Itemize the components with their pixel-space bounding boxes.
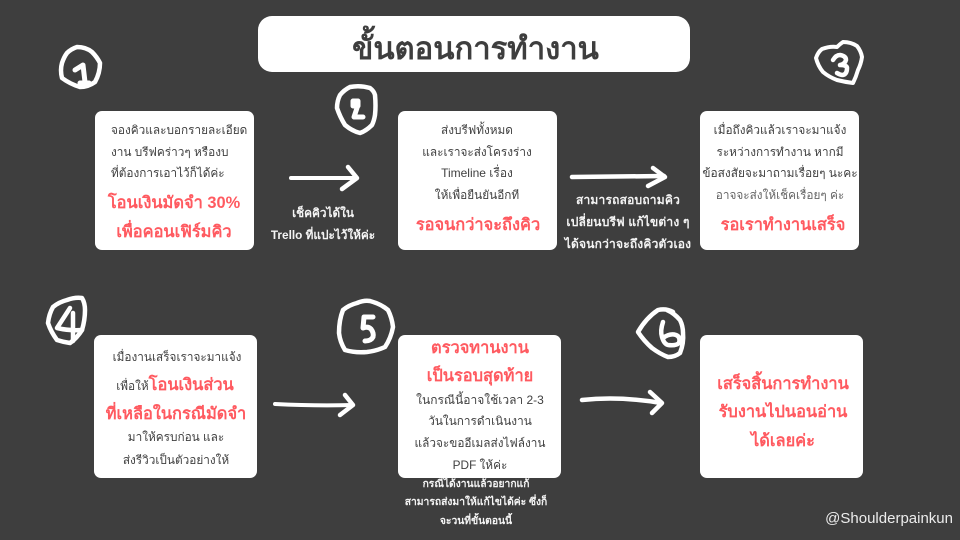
panel: step 6 [700,335,863,478]
step 2 text line 1: ส่งบรีฟทั้งหมด [441,123,513,137]
step 1 text line 3: ที่ต้องการเอาไว้ก็ได้ค่ะ [111,166,225,180]
step 5 text line 3: แล้วจะขออีเมลส่งไฟล์งาน [415,436,545,450]
arrow: step 1 to 2 [291,167,357,189]
step 1 text line 1: จองคิวและบอกรายละเอียด [111,123,247,137]
step 4 highlight: ที่เหลือในกรณีมัดจำ [106,405,246,423]
caption: revisions [405,478,547,527]
icon: number 4 [48,298,85,343]
step 4 mixed line: เพื่อให้โอนเงินส่วน [116,376,234,394]
step 6 highlight line 3: ได้เลยค่ะ [751,432,815,450]
caption: change brief: เปลี่ยนบรีฟ แก้ไขต่าง ๆ [566,215,690,229]
caption: revisions: สามารถส่งมาให้แก้ไขได้ค่ะ ซึ่งก็ [405,497,547,508]
step 4 text line 1: เมื่องานเสร็จเราจะมาแจ้ง [113,350,241,364]
step 3 text line 3: ข้อสงสัยจะมาถามเรื่อยๆ นะคะ [702,166,858,180]
step 5 text line 1: ในกรณีนี้อาจใช้เวลา 2-3 [416,393,544,407]
step 2 text line 4: ให้เพื่อยืนยันอีกที [435,188,519,202]
icon: number 6 [638,309,683,357]
step 5 text line 4: PDF ให้ค่ะ [453,458,507,472]
panel: step 4 [94,335,257,478]
arrow: step 5 to 6 [582,392,662,413]
step 3 text line 2: ระหว่างการทำงาน หากมี [716,145,844,159]
step 6 highlight line 1: เสร็จสิ้นการทำงาน [717,375,849,393]
icon: number 3 [816,42,862,83]
panel: step 3 [700,111,859,250]
step 5 highlight line 2: เป็นรอบสุดท้าย [427,367,533,385]
step 3 text line 4: อาจจะส่งให้เช็คเรื่อยๆ ค่ะ [716,188,844,202]
caption: change brief: สามารถสอบถามคิว [576,193,680,207]
caption: Trello [271,206,375,242]
step 2 text line 2: และเราจะส่งโครงร่าง [422,145,532,159]
step 1 highlight line 1: โอนเงินมัดจำ 30% [108,194,240,212]
step 1 text line 2: งาน บรีฟคร่าวๆ หรืองบ [111,145,228,159]
panel: step 2 [398,111,557,250]
title [261,16,690,72]
step 4 text line 4: มาให้ครบก่อน และ [128,430,224,444]
icon: number 1 [61,47,100,87]
arrow: step 2 to 3 [572,168,665,186]
step 5 highlight line 1: ตรวจทานงาน [431,339,529,357]
step 5 text line 2: วันในการดำเนินงาน [428,414,532,428]
step 1 highlight line 2: เพื่อคอนเฟิร์มคิว [116,223,232,241]
credit: @Shoulderpainkun [825,510,953,527]
caption: revisions: จะวนที่ขั้นตอนนี้ [440,516,512,527]
caption: change brief: ได้จนกว่าจะถึงคิวตัวเอง [565,237,691,251]
arrow: step 4 to 5 [275,395,353,415]
step 2 text line 3: Timeline เรื่อง [441,166,513,180]
caption: Trello: เช็คคิวได้ใน [292,206,354,220]
step 4 text line 5: ส่งรีวิวเป็นตัวอย่างให้ [123,453,229,467]
title: ขั้นตอนการทำงาน [352,31,599,66]
panel: step 1 [95,111,254,250]
step 3 highlight: รอเราทำงานเสร็จ [721,216,845,234]
caption: revisions: กรณีได้งานแล้วอยากแก้ [423,479,529,490]
caption: Trello: Trello ที่แปะไว้ให้ค่ะ [271,228,375,242]
caption: change brief [564,193,691,251]
icon: number 2 [337,86,376,133]
panel: step 5 [398,335,561,478]
step 2 highlight: รอจนกว่าจะถึงคิว [416,216,540,234]
step 6 highlight line 2: รับงานไปนอนอ่าน [719,403,847,421]
step 3 text line 1: เมื่อถึงคิวแล้วเราจะมาแจ้ง [714,123,846,137]
icon: number 5 [339,301,393,352]
